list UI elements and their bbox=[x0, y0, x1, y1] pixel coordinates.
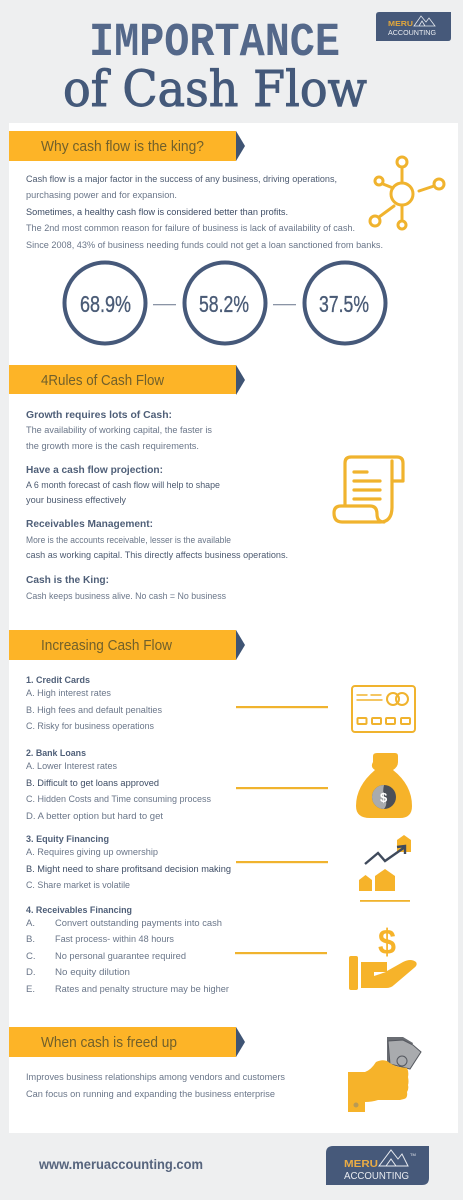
title: IMPORTANCE bbox=[89, 17, 340, 70]
list: receivables financing: C. bbox=[26, 951, 36, 962]
list: receivables financing: Convert outstanding payments into cash bbox=[55, 918, 222, 929]
list: receivables financing: 4. Receivables Financing bbox=[26, 905, 132, 916]
icon: hand holding cash bbox=[348, 1037, 421, 1112]
rule: projection: Have a cash flow projection: bbox=[26, 464, 163, 476]
text block: intro: Since 2008, 43% of business needing funds could not get a loan sanctioned from banks. bbox=[26, 240, 383, 251]
list: receivables financing bbox=[26, 905, 230, 995]
rule: receivables: Receivables Management: bbox=[26, 518, 153, 530]
list: receivables financing: B. bbox=[26, 934, 35, 945]
text block: benefits bbox=[26, 1072, 285, 1100]
text block: benefits: Can focus on running and expanding the business enterprise bbox=[26, 1089, 275, 1100]
heading: why cash flow is the king bbox=[9, 131, 245, 161]
text block: intro bbox=[26, 174, 383, 251]
text block: intro: Sometimes, a healthy cash flow is considered better than profits. bbox=[26, 207, 288, 218]
logo: bottom: ACCOUNTING bbox=[344, 1171, 409, 1182]
rule: projection: your business effectively bbox=[26, 495, 126, 506]
list: bank loans: B. Difficult to get loans approved bbox=[26, 778, 159, 789]
list: receivables financing: Fast process- within 48 hours bbox=[55, 934, 174, 945]
panel: 4 rules of cash flow bbox=[9, 365, 403, 602]
connector bbox=[153, 304, 176, 305]
list: equity financing: C. Share market is volatile bbox=[26, 880, 130, 891]
heading: 4 rules: 4Rules of Cash Flow bbox=[41, 372, 164, 389]
list: credit cards: 1. Credit Cards bbox=[26, 675, 90, 686]
rule: receivables: More is the accounts receivable, lesser is the available bbox=[26, 535, 231, 546]
list: receivables financing: E. bbox=[26, 984, 35, 995]
stat: 58.2% bbox=[184, 262, 266, 344]
logo: bottom: MERU bbox=[344, 1158, 378, 1170]
panel: increasing cash flow bbox=[9, 630, 417, 995]
list: equity financing: A. Requires giving up ownership bbox=[26, 847, 158, 858]
icon: money bag bbox=[356, 753, 412, 818]
title bbox=[63, 17, 367, 118]
list: bank loans: D. A better option but hard to get bbox=[26, 811, 163, 822]
heading: 4 rules bbox=[9, 365, 245, 395]
list: receivables financing: D. bbox=[26, 967, 36, 978]
list: receivables financing: No personal guarantee required bbox=[55, 951, 186, 962]
list: credit cards: B. High fees and default penalties bbox=[26, 705, 162, 716]
logo: top bbox=[376, 12, 451, 41]
arrow: receivables financing bbox=[235, 952, 327, 954]
list: credit cards bbox=[26, 675, 162, 732]
text block: intro: Cash flow is a major factor in the success of any business, driving operations, bbox=[26, 174, 337, 185]
icon: network bbox=[370, 157, 444, 229]
list: credit cards: A. High interest rates bbox=[26, 688, 111, 699]
text block: intro: purchasing power and for expansion. bbox=[26, 190, 177, 201]
list: equity financing: B. Might need to share profitsand decision making bbox=[26, 864, 231, 875]
rule: growth bbox=[26, 409, 212, 452]
rule: receivables bbox=[26, 518, 288, 561]
list: credit cards: C. Risky for business operations bbox=[26, 721, 154, 732]
title: of Cash Flow bbox=[63, 60, 367, 118]
rule: projection: A 6 month forecast of cash flow will help to shape bbox=[26, 480, 220, 491]
text block: intro: The 2nd most common reason for failure of business is lack of availability of cash. bbox=[26, 223, 355, 234]
rule: growth: the growth more is the cash requirements. bbox=[26, 441, 199, 452]
stat: 37.5% bbox=[304, 262, 386, 344]
rule: king: Cash keeps business alive. No cash = No business bbox=[26, 591, 226, 602]
list: bank loans: C. Hidden Costs and Time consuming process bbox=[26, 794, 211, 805]
stat: 68.9% bbox=[64, 262, 146, 344]
rule: growth: Growth requires lots of Cash: bbox=[26, 409, 172, 421]
text block: benefits: Improves business relationships among vendors and customers bbox=[26, 1072, 285, 1083]
icon: credit card bbox=[352, 686, 415, 732]
logo: top: ACCOUNTING bbox=[388, 30, 436, 37]
list: receivables financing: No equity dilution bbox=[55, 967, 130, 978]
heading: increasing cash flow: Increasing Cash Flow bbox=[41, 637, 172, 654]
stat: 37.5%: 37.5% bbox=[319, 291, 369, 317]
icon: hand with dollar bbox=[349, 923, 417, 990]
list: bank loans bbox=[26, 748, 211, 822]
icon: growth houses bbox=[359, 835, 411, 902]
logo: top: MERU bbox=[388, 19, 413, 28]
list: equity financing: 3. Equity Financing bbox=[26, 834, 109, 845]
heading: increasing cash flow bbox=[9, 630, 245, 660]
panel: when cash is freed up bbox=[9, 1027, 421, 1112]
list: receivables financing: A. bbox=[26, 918, 35, 929]
rule: king bbox=[26, 574, 226, 602]
stat: 68.9%: 68.9% bbox=[80, 291, 131, 317]
rule: receivables: cash as working capital. This directly affects business operations. bbox=[26, 550, 288, 561]
list: receivables financing: Rates and penalty structure may be higher bbox=[55, 984, 230, 995]
logo: bottom bbox=[326, 1146, 429, 1185]
rule: growth: The availability of working capital, the faster is bbox=[26, 425, 212, 436]
icon: scroll bbox=[334, 457, 403, 522]
arrow: bank loans bbox=[236, 787, 328, 789]
arrow: equity financing bbox=[236, 861, 328, 863]
connector bbox=[273, 304, 296, 305]
list: bank loans: 2. Bank Loans bbox=[26, 748, 86, 759]
logo: bottom: TM bbox=[410, 1152, 416, 1157]
arrow: credit cards bbox=[236, 706, 328, 708]
list: equity financing bbox=[26, 834, 231, 891]
heading: when cash is freed up bbox=[9, 1027, 245, 1057]
heading: when cash is freed up: When cash is freed up bbox=[41, 1034, 177, 1051]
rule: king: Cash is the King: bbox=[26, 574, 109, 586]
stat: 58.2%: 58.2% bbox=[199, 291, 249, 317]
rule: projection bbox=[26, 464, 220, 506]
panel: why cash flow is the king bbox=[9, 131, 444, 344]
icon: hand with dollar: $ bbox=[378, 923, 396, 962]
list: bank loans: A. Lower Interest rates bbox=[26, 761, 117, 772]
heading: why cash flow is the king: Why cash flow is the king? bbox=[41, 138, 204, 155]
icon: money bag: $ bbox=[380, 790, 388, 805]
footer: website: www.meruaccounting.com bbox=[38, 1156, 203, 1172]
